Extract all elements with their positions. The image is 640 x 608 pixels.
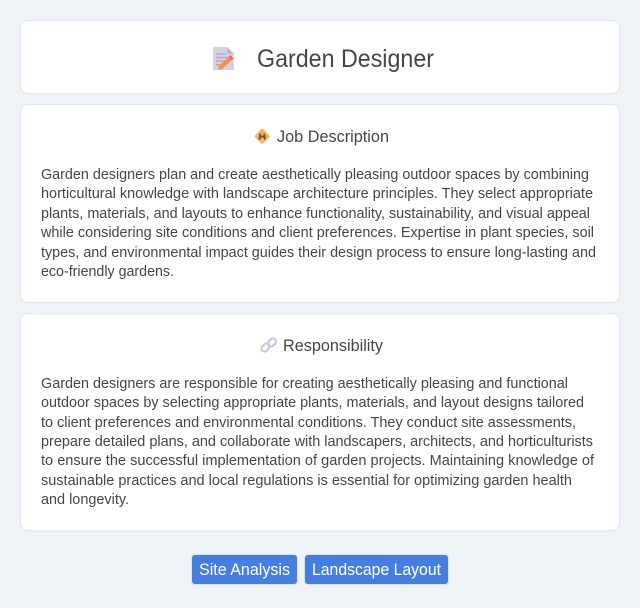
text block: responsibility: to client preferences and environmental conditions. They conduct site assessments,	[41, 414, 576, 431]
icon: orange diamond sign	[254, 128, 270, 144]
text block: responsibility: outdoor spaces by selecting appropriate plants, materials, and layout designs tailored	[41, 394, 584, 411]
icon: document with pencil	[213, 47, 234, 70]
text block: responsibility: Garden designers are responsible for creating aesthetically pleasing and functional	[41, 375, 568, 392]
text block: job description: eco-friendly gardens.	[41, 263, 174, 280]
text block: job description: types, and environmental impact guides their design process to ensure long-lasting and	[41, 244, 596, 261]
panel: responsibility card	[20, 313, 620, 531]
text block: responsibility: sustainable practices and local regulations is essential for optimizing garden health	[41, 472, 572, 489]
heading: Responsibility: Responsibility	[283, 337, 384, 355]
tag label: Site Analysis: Site Analysis	[199, 561, 290, 579]
text block: job description	[40, 166, 596, 280]
heading: Job Description: Job Description	[277, 128, 389, 146]
panel: job description card	[20, 104, 620, 303]
icon: chain link	[260, 337, 277, 353]
button: Landscape Layout	[305, 555, 448, 584]
text block: responsibility: prepare detailed plans, and collaborate with landscapers, architects, and horticulturists	[41, 433, 593, 450]
text block: responsibility	[41, 375, 595, 508]
tag label: Landscape Layout: Landscape Layout	[312, 561, 441, 579]
button: Site Analysis	[192, 555, 297, 584]
panel: header card	[20, 20, 620, 94]
text block: job description: plants, materials, and layouts to enhance functionality, sustainability, and visual appeal	[41, 205, 590, 222]
text block: responsibility: and longevity.	[41, 491, 129, 508]
text block: job description: while considering site conditions and client preferences. Expertise in plant species, soil	[40, 224, 594, 241]
text block: job description: Garden designers plan and create aesthetically pleasing outdoor spaces by combining	[41, 166, 589, 183]
title: Garden Designer	[257, 45, 434, 73]
text block: job description: horticultural knowledge with landscape architecture principles. They select appropriate	[41, 185, 593, 202]
text block: responsibility: to ensure the successful implementation of garden projects. Maintaining knowledge of	[41, 452, 595, 469]
